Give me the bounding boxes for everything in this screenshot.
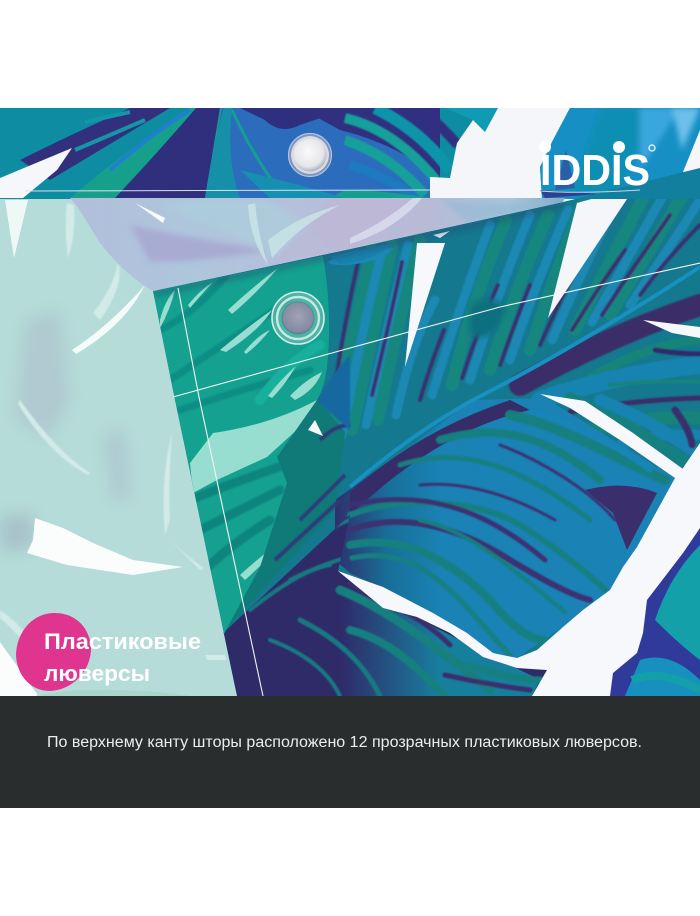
teal left leaf bbox=[153, 256, 329, 634]
lower feather under the white slit bbox=[224, 515, 547, 696]
bottom-right leaf bbox=[610, 528, 700, 696]
heading: Пластиковые люверсы bbox=[44, 629, 201, 686]
upper feather: streaks above the spine bbox=[332, 175, 700, 440]
dark teal wedge beside the teal leaf bbox=[222, 400, 345, 634]
logo: IDDIS: IDDIS bbox=[540, 146, 650, 195]
decorative pink blob badge bbox=[16, 613, 91, 691]
lower-right feather: flowing blue, teal and navy bands bbox=[335, 398, 675, 658]
panel: dark caption bar bbox=[0, 696, 700, 808]
photo: shower curtain close-up bbox=[0, 108, 700, 700]
spine of the feather bbox=[350, 267, 700, 487]
caption text: По верхнему канту шторы расположено 12 прозрачных пластиковых люверсов. bbox=[47, 734, 642, 751]
upper-right feather above the white slit bbox=[570, 398, 692, 465]
white leaf cut-out bbox=[27, 518, 183, 575]
white slit between leaf lobes bbox=[338, 443, 700, 696]
icon: metal-look eyelet on top band bbox=[288, 134, 332, 176]
stitching on the top hem bbox=[25, 190, 430, 191]
panel: top band of the curtain with hem bbox=[0, 108, 700, 199]
panel: folded-back curtain, pale mint reverse side bbox=[0, 190, 240, 700]
white triangles in the print bbox=[405, 243, 445, 367]
icon: clear plastic eyelet bbox=[272, 292, 324, 344]
white cut-outs in the print bbox=[0, 148, 72, 198]
heading: Пластиковые люверсы: Пластиковые bbox=[44, 629, 201, 654]
shadow under the fold bbox=[153, 205, 563, 294]
main fabric corner over the band bbox=[576, 168, 700, 199]
panel: lilac folded hem bbox=[60, 195, 570, 295]
panel: main curtain fabric with leaf print bbox=[153, 199, 700, 696]
heading: Пластиковые люверсы: люверсы bbox=[44, 661, 150, 686]
right band along the spine bbox=[520, 305, 700, 445]
stitching on the main fabric bbox=[173, 263, 700, 696]
